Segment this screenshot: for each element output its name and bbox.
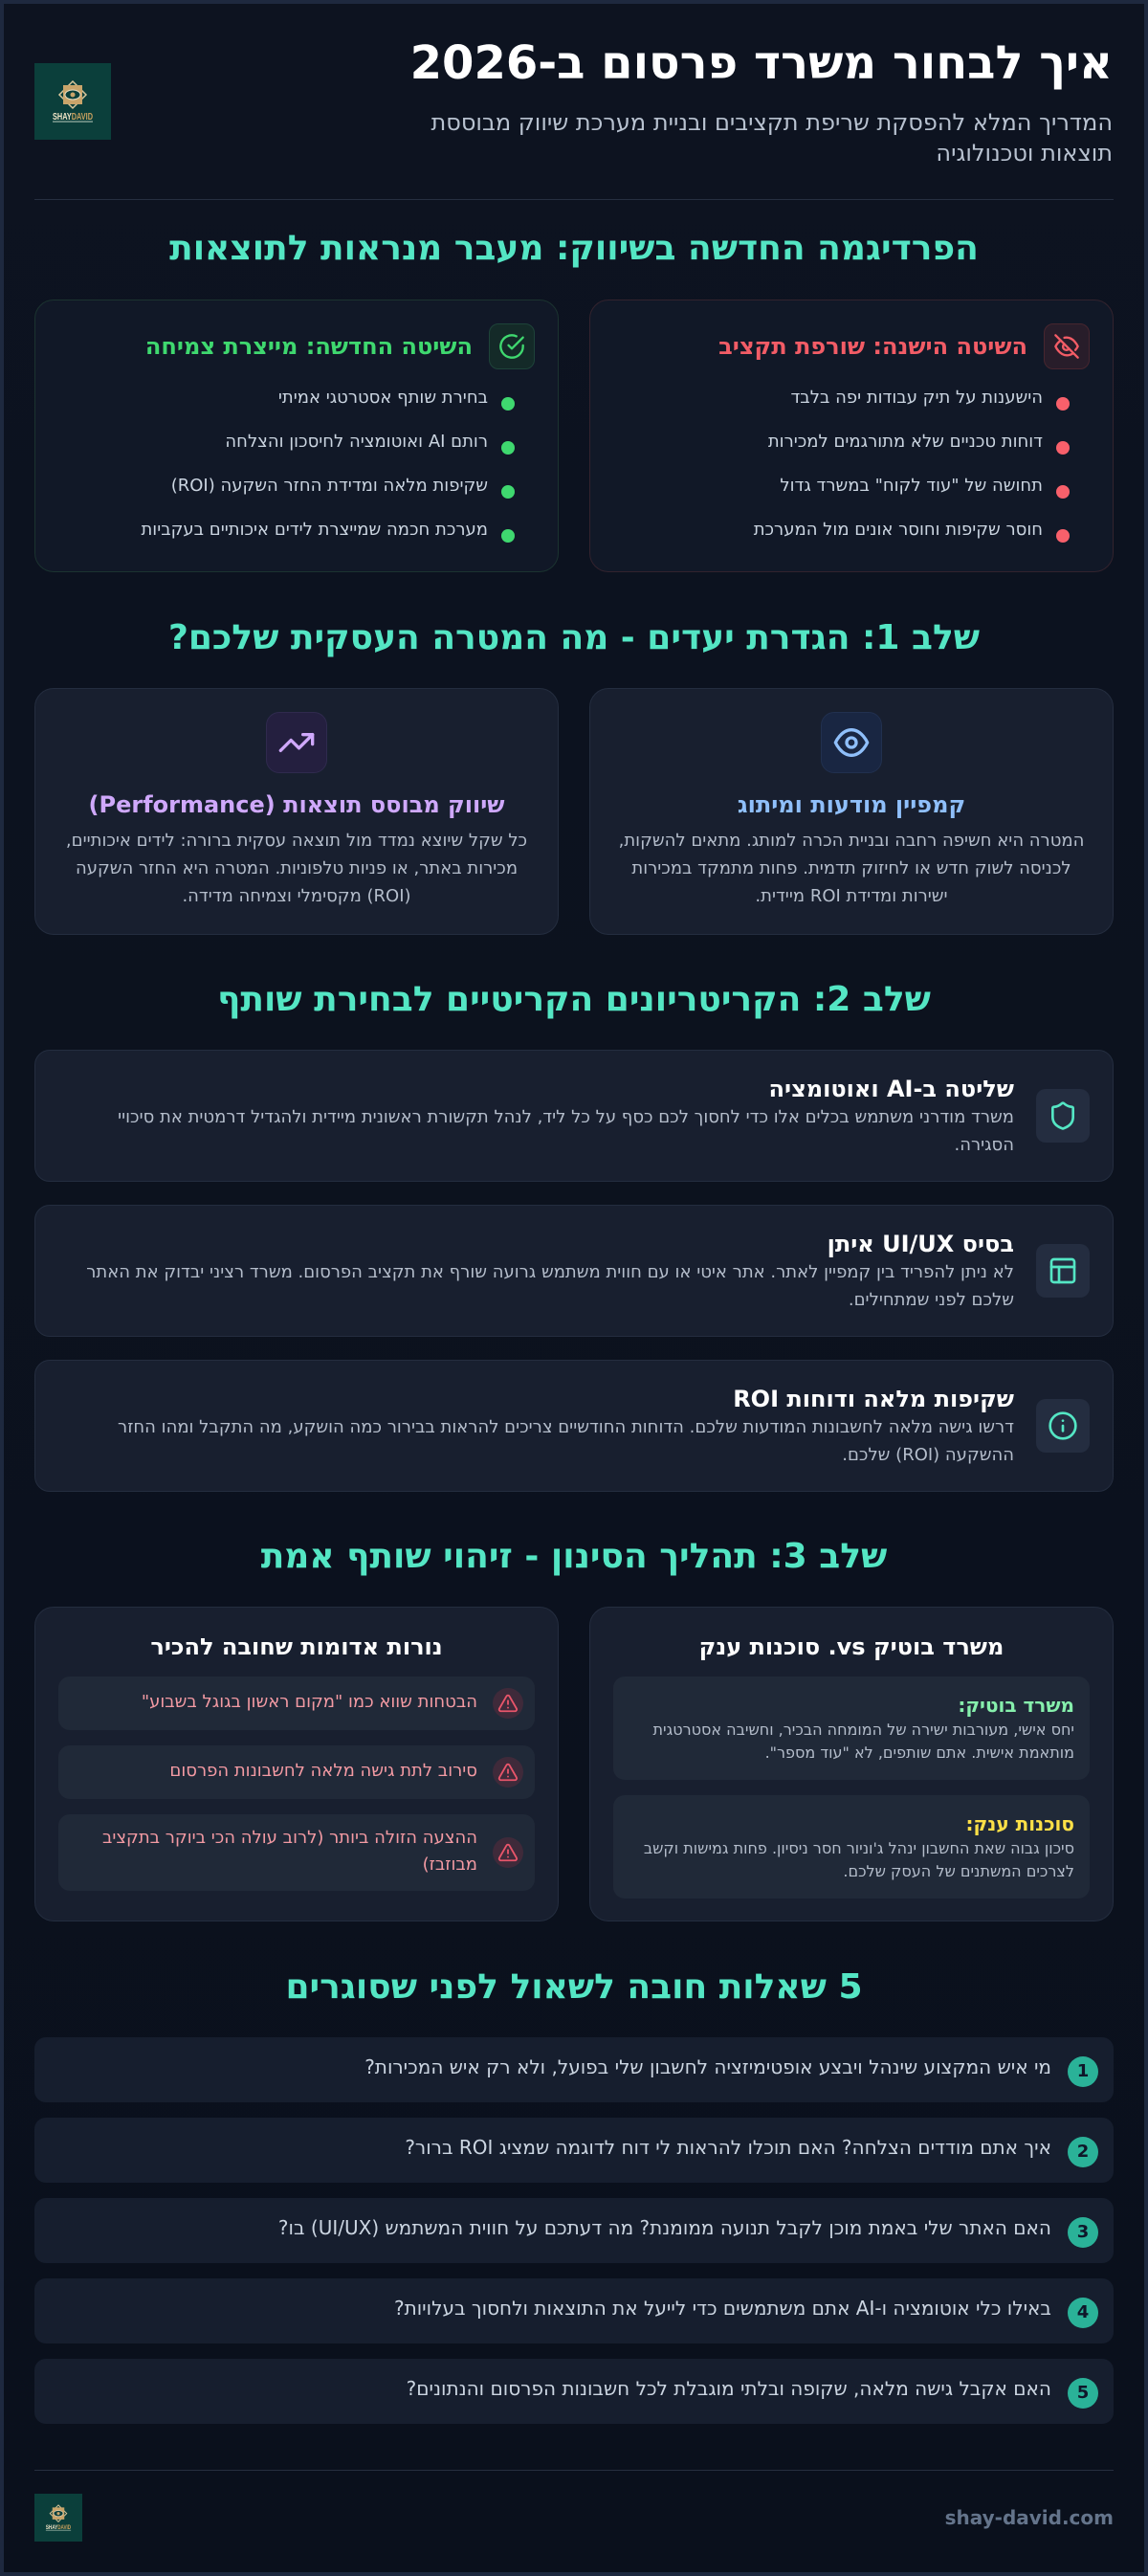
old method list: [754, 388, 1070, 543]
new method list: [141, 388, 515, 543]
criterion text: ההשקעה (ROI) שלכם.: [842, 1445, 1014, 1465]
question 3: האם האתר שלי באמת מוכן לקבל תנועה ממומנת? מה דעתכם על חווית המשתמש (UI/UX) בו?: [278, 2216, 1051, 2239]
red flag 1: [58, 1677, 535, 1730]
question 3: [34, 2198, 1114, 2263]
criterion: AI and automation: [34, 1050, 1114, 1182]
box: boutique: [613, 1677, 1090, 1780]
icon: eye: [821, 712, 882, 773]
performance title: שיווק מבוסס תוצאות (Performance): [89, 791, 504, 818]
header logo: [34, 63, 111, 140]
question 1: [34, 2037, 1114, 2102]
box: giant agency: סוכנות ענק:: [966, 1812, 1074, 1835]
icon: info: [1036, 1399, 1090, 1453]
question 2: איך אתם מודדים הצלחה? האם תוכלו להראות לי דוח לדוגמה שמציג ROI ברור?: [405, 2136, 1051, 2159]
red flag 2: סירוב לתת גישה מלאה לחשבונות הפרסום: [169, 1761, 477, 1781]
question 1: 1: [1077, 2061, 1089, 2081]
question 4: 4: [1077, 2302, 1089, 2322]
subtitle: תוצאות וטכנולוגיה: [936, 140, 1113, 167]
footer logo: [34, 2494, 82, 2542]
panel: old method: [589, 300, 1114, 572]
panel: boutique vs giant agency: [589, 1607, 1114, 1921]
subtitle: [430, 109, 1113, 167]
header logo: SHAYDAVID: [53, 112, 93, 122]
footer website: shay-david.com: [945, 2506, 1114, 2529]
criterion text: [118, 1107, 1014, 1155]
criterion title: בסיס UI/UX איתן: [828, 1231, 1014, 1257]
new method list: שקיפות מלאה ומדידת החזר השקעה (ROI): [171, 476, 488, 496]
awareness text: המטרה היא חשיפה רחבה ובניית הכרה למותג. מתאים להשקות,: [619, 831, 1084, 851]
red flag 1: הבטחות שווא כמו "מקום ראשון בגוגל בשבוע": [142, 1692, 477, 1712]
panel title: משרד בוטיק vs. סוכנות ענק: [699, 1633, 1004, 1660]
criterion title: שקיפות מלאה ודוחות ROI: [733, 1386, 1014, 1412]
performance text: (ROI) מקסימלי וצמיחה מדידה.: [182, 886, 411, 906]
awareness title: קמפיין מודעות ומיתוג: [738, 791, 965, 818]
red flag 3: [58, 1814, 535, 1891]
criterion text: [86, 1262, 1014, 1310]
heading: paradigm: הפרדיגמה החדשה בשיווק: מעבר מנראות לתוצאות: [169, 229, 979, 268]
criterion text: [118, 1417, 1014, 1465]
criterion: transparency and ROI: [34, 1360, 1114, 1492]
box: giant agency: לצרכים המשתנים של העסק שלכם.: [843, 1862, 1074, 1880]
box: boutique: משרד בוטיק:: [958, 1694, 1074, 1717]
old method list: חוסר שקיפות וחוסר אונים מול המערכת: [754, 520, 1043, 540]
icon: eye off: [1044, 323, 1090, 369]
new method title: השיטה החדשה: מייצרת צמיחה: [145, 333, 473, 360]
old method list: הישענות על תיק עבודות יפה בלבד: [790, 388, 1043, 408]
criterion title: שליטה ב-AI ואוטומציה: [769, 1076, 1014, 1102]
subtitle: המדריך המלא להפסקת שריפת תקציבים ובניית מערכת שיווק מבוססת: [430, 109, 1113, 136]
panel: awareness campaign: [589, 688, 1114, 935]
question 1: מי איש המקצוע שינהל ויבצע אופטימיזציה לחשבון שלי בפועל, ולא רק איש המכירות?: [364, 2055, 1051, 2078]
question 4: [34, 2278, 1114, 2343]
new method list: מערכת חכמה שמייצרת לידים איכותיים בעקביות: [141, 520, 488, 540]
question 4: באילו כלי אוטומציה ו-AI אתם משתמשים כדי לייעל את התוצאות ולחסוך בעלויות?: [394, 2297, 1051, 2320]
box: giant agency: סיכון גבוה שאת החשבון ינהל ג'וניור חסר ניסיון. פחות גמישות וקשב: [644, 1839, 1074, 1857]
question 2: [34, 2118, 1114, 2183]
panel: new method: [34, 300, 559, 572]
old method title: השיטה הישנה: שורפת תקציב: [718, 333, 1027, 360]
red flag 3: ההצעה הזולה ביותר (לרוב עולה הכי ביוקר בתקציב: [102, 1828, 477, 1848]
icon: trending up: [266, 712, 327, 773]
heading: step 1: שלב 1: הגדרת יעדים - מה המטרה העסקית שלכם?: [168, 618, 980, 657]
panel title: נורות אדומות שחובה להכיר: [150, 1633, 443, 1660]
box: boutique: מותאמת אישית. אתם שותפים, לא "עוד מספר".: [765, 1743, 1074, 1762]
title: איך לבחור משרד פרסום ב-2026: [410, 36, 1113, 90]
box: giant agency: [613, 1795, 1090, 1899]
old method list: תחושה של "עוד לקוח" במשרד גדול: [780, 476, 1043, 496]
criterion text: שלכם לפני שמתחילים.: [849, 1290, 1014, 1310]
question 5: האם אקבל גישה מלאה, שקופה ובלתי מוגבלת לכל חשבונות הפרסום והנתונים?: [407, 2377, 1051, 2400]
criterion text: דרשו גישה מלאה לחשבונות המודעות שלכם. הדוחות החודשיים צריכים להראות בבירור כמה הושקע, מה התקבל ומהו החזר: [118, 1417, 1014, 1437]
box: boutique: יחס אישי, מעורבות ישירה של המומחה הבכיר, וחשיבה אסטרטגית: [653, 1721, 1074, 1739]
red flag 3: מבוזבז): [423, 1854, 477, 1875]
criterion: UI/UX: [34, 1205, 1114, 1337]
new method list: בחירת שותף אסטרטגי אמיתי: [278, 388, 488, 408]
performance text: [66, 831, 527, 906]
criterion text: הסגירה.: [954, 1135, 1014, 1155]
awareness text: [619, 831, 1084, 906]
icon: check circle: [489, 323, 535, 369]
awareness text: ישירות ומדידת ROI מיידית.: [755, 886, 948, 906]
icon: shield: [1036, 1089, 1090, 1143]
awareness text: לכניסה לשוק חדש או לחיזוק תדמית. פחות מתמקד במכירות: [631, 858, 1071, 878]
new method list: רותם AI ואוטומציה לחיסכון והצלחה: [225, 432, 488, 452]
question 2: 2: [1077, 2142, 1089, 2162]
performance text: מכירות באתר, או פניות טלפוניות. המטרה היא החזר השקעה: [76, 858, 518, 878]
criterion text: לא ניתן להפריד בין קמפיין לאתר. אתר איטי או עם חווית משתמש גרועה שורף את תקציב הפרסום. משרד רציני יבדוק את האתר: [86, 1262, 1014, 1282]
question 5: 5: [1077, 2383, 1089, 2403]
red flag 2: [58, 1745, 535, 1799]
old method list: דוחות טכניים שלא מתורגמים למכירות: [768, 432, 1043, 452]
heading: five questions: 5 שאלות חובה לשאול לפני שסוגרים: [285, 1967, 863, 2007]
footer logo: SHAYDAVID: [46, 2524, 71, 2531]
question 3: 3: [1077, 2222, 1089, 2242]
heading: step 2: שלב 2: הקריטריונים הקריטיים לבחירת שותף: [217, 980, 931, 1019]
performance text: כל שקל שיוצא נמדד מול תוצאה עסקית ברורה: לידים איכותיים,: [66, 831, 527, 851]
panel: red flags: [34, 1607, 559, 1921]
heading: step 3: שלב 3: תהליך הסינון - זיהוי שותף אמת: [261, 1537, 887, 1576]
criterion text: משרד מודרני משתמש בכלים אלו כדי לחסוך לכם כסף על כל ליד, לנהל תקשורת ראשונית מיידית ולהגדיל דרמטית את סיכויי: [118, 1107, 1014, 1127]
panel: performance marketing: [34, 688, 559, 935]
question 5: [34, 2359, 1114, 2424]
icon: layout: [1036, 1244, 1090, 1298]
